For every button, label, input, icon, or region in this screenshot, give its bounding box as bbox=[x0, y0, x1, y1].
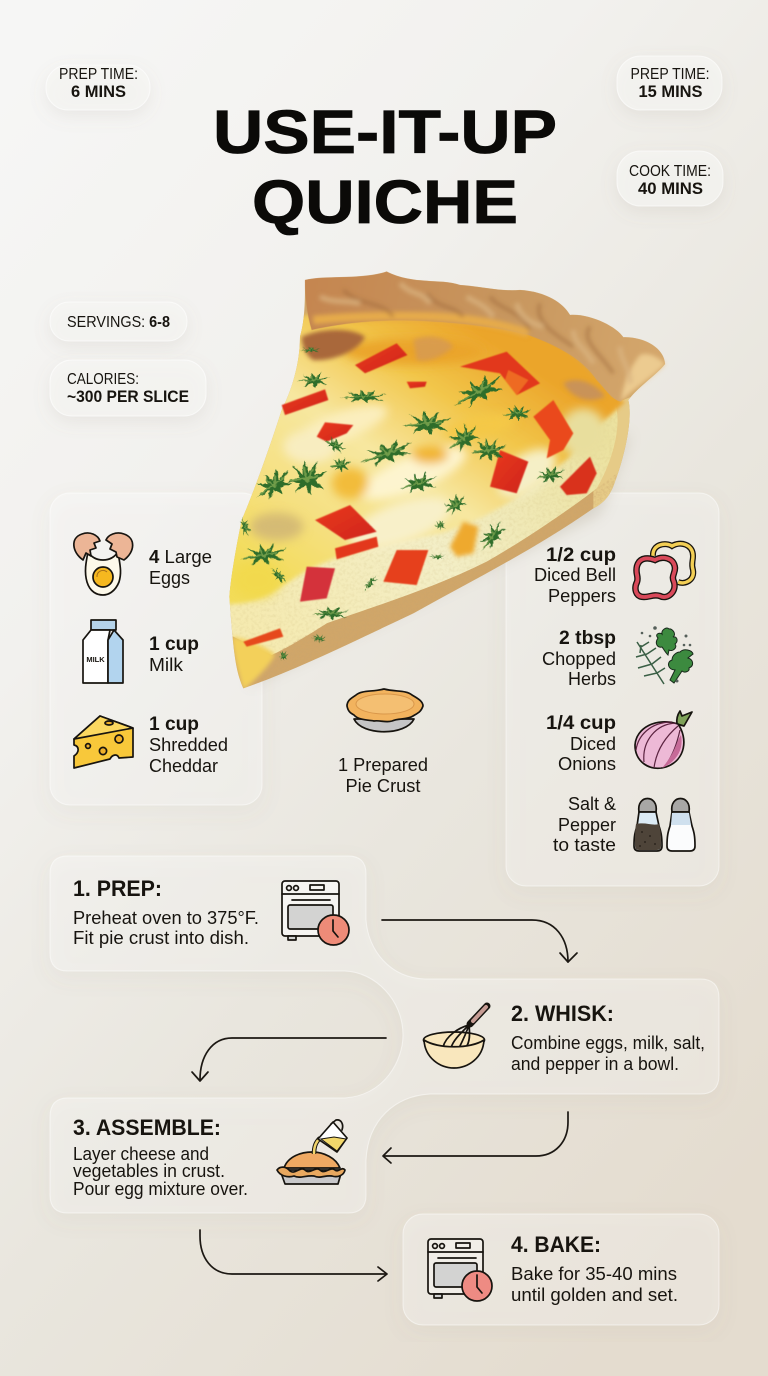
badge: prep time 6 mins: PREP TIME: bbox=[59, 66, 138, 83]
panel: ingredients right bbox=[506, 493, 719, 886]
step 2 text: 2. WHISK: bbox=[511, 1001, 614, 1026]
ingredient text: onions: Onions bbox=[558, 754, 616, 774]
arrow: step 2 to 3 bbox=[192, 1038, 386, 1081]
quiche herbs bbox=[238, 347, 566, 661]
quiche inner layers bbox=[223, 308, 640, 690]
step 3 text: 3. ASSEMBLE: bbox=[73, 1115, 221, 1140]
ingredient text: milk bbox=[149, 634, 199, 675]
step 3 text: vegetables in crust. bbox=[73, 1161, 225, 1181]
badge: prep time 15 mins: 15 MINS bbox=[638, 83, 702, 101]
icon: oven with timer bbox=[282, 881, 349, 945]
step 3 text: Layer cheese and bbox=[73, 1144, 209, 1164]
ingredient text: milk: Milk bbox=[149, 655, 184, 675]
ingredient text: herbs: Herbs bbox=[568, 669, 616, 689]
icon: salt shaker bbox=[667, 798, 695, 851]
ingredient text: peppers bbox=[534, 545, 616, 606]
badge: servings: SERVINGS: 6-8 bbox=[67, 314, 170, 331]
ingredient text: salt and pepper: Salt & bbox=[568, 794, 616, 814]
quiche cream and cheese highlights bbox=[233, 338, 607, 598]
step 3 text bbox=[73, 1115, 248, 1199]
ingredient text: eggs: 4 Large bbox=[149, 547, 212, 567]
quiche orange pepper bbox=[450, 522, 478, 557]
step 4 text bbox=[511, 1232, 678, 1305]
title: USE-IT-UP bbox=[213, 98, 557, 166]
ingredient text: milk: 1 cup bbox=[149, 634, 199, 655]
quiche slice photo illustration bbox=[223, 272, 665, 690]
ingredient text: onions: Diced bbox=[570, 734, 616, 754]
step 1 text bbox=[73, 876, 259, 948]
icon: prepared pie crust bbox=[347, 689, 423, 732]
ingredient text: onions bbox=[546, 713, 616, 774]
icon: milk carton: MILK bbox=[86, 655, 105, 664]
ingredient text: peppers: 1/2 cup bbox=[546, 545, 616, 566]
quiche rim highlight bbox=[621, 354, 665, 402]
icon: pouring into pie bbox=[277, 1120, 347, 1184]
ingredient text: salt and pepper: to taste bbox=[553, 835, 616, 855]
quiche rim shading bbox=[313, 283, 630, 383]
step 4 text: 4. BAKE: bbox=[511, 1232, 601, 1257]
icon: red onion bbox=[635, 711, 692, 768]
quiche crust rim bbox=[305, 272, 665, 402]
badge: cook time 40 mins bbox=[617, 151, 723, 206]
arrow: step 3 back from 2 bbox=[383, 1112, 568, 1163]
ingredient text: herbs: 2 tbsp bbox=[559, 628, 616, 649]
icon: milk carton bbox=[83, 620, 123, 683]
icon: bell pepper rings bbox=[635, 544, 693, 597]
quiche crumb texture bbox=[231, 430, 614, 648]
ingredient text: peppers: Peppers bbox=[548, 586, 616, 606]
text: pie crust label: 1 Prepared bbox=[338, 755, 428, 775]
panel: ingredients left bbox=[50, 493, 262, 805]
badge: prep time 6 mins bbox=[46, 65, 150, 110]
text: pie crust label bbox=[338, 755, 428, 796]
ingredient text: herbs bbox=[542, 628, 616, 689]
ingredient text: cheddar: 1 cup bbox=[149, 714, 199, 735]
icon: oven with timer bbox=[428, 1239, 492, 1301]
arrow: step 1 to 2 bbox=[382, 920, 577, 962]
quiche side wall crust bbox=[593, 397, 631, 508]
step 1 text: 1. PREP: bbox=[73, 876, 162, 901]
title: QUICHE bbox=[252, 168, 518, 236]
badge: calories: ~300 PER SLICE bbox=[67, 388, 189, 406]
step 1 text: Fit pie crust into dish. bbox=[73, 928, 249, 948]
ingredient text: cheddar: Shredded bbox=[149, 735, 228, 755]
ingredient text: cheddar bbox=[149, 714, 228, 776]
icon: whisk and bowl bbox=[424, 1006, 487, 1068]
step 4 text: Bake for 35-40 mins bbox=[511, 1264, 677, 1284]
step 3 text: Pour egg mixture over. bbox=[73, 1179, 248, 1199]
title bbox=[213, 98, 557, 236]
badge: prep time 15 mins bbox=[617, 56, 722, 110]
quiche silhouette and base crust bbox=[229, 272, 665, 688]
step 2 text bbox=[511, 1001, 705, 1074]
step 2 text: and pepper in a bowl. bbox=[511, 1054, 679, 1074]
arrow: step 3 to 4 bbox=[200, 1230, 387, 1281]
step 2 text: Combine eggs, milk, salt, bbox=[511, 1033, 705, 1053]
ingredient text: onions: 1/4 cup bbox=[546, 713, 616, 734]
quiche peppers bbox=[243, 343, 597, 647]
badge: servings bbox=[50, 302, 187, 341]
icon: chopped herbs bbox=[636, 626, 693, 684]
quiche filling side bbox=[227, 403, 618, 655]
text: pie crust label: Pie Crust bbox=[346, 776, 420, 796]
icon: cheese wedge bbox=[74, 716, 133, 768]
ingredient text: peppers: Diced Bell bbox=[534, 565, 616, 585]
quiche browned spots bbox=[302, 330, 365, 360]
step 1 text: Preheat oven to 375°F. bbox=[73, 908, 259, 928]
badge: prep time 15 mins: PREP TIME: bbox=[630, 66, 710, 83]
panel: step 4 bbox=[403, 1214, 719, 1325]
ingredient text: eggs line 2: Eggs bbox=[149, 568, 190, 588]
ingredient text: cheddar: Cheddar bbox=[149, 756, 218, 776]
panel: connected steps 1 to 3 bbox=[50, 856, 719, 1213]
quiche soft shadow bbox=[247, 433, 630, 687]
quiche tip yellow bbox=[232, 637, 275, 690]
ingredient text: herbs: Chopped bbox=[542, 649, 616, 669]
badge: cook time 40 mins: COOK TIME: bbox=[629, 163, 711, 180]
quiche base crust texture bbox=[243, 473, 617, 690]
ingredient text: salt and pepper: Pepper bbox=[558, 815, 616, 835]
icon: cracked egg bbox=[74, 533, 133, 595]
badge: prep time 6 mins: 6 MINS bbox=[71, 83, 126, 101]
badge: calories: CALORIES: bbox=[67, 371, 139, 388]
step 4 text: until golden and set. bbox=[511, 1285, 678, 1305]
ingredient text: salt and pepper bbox=[553, 794, 616, 855]
icon: pepper shaker bbox=[634, 798, 662, 851]
quiche top surface bbox=[223, 308, 625, 604]
badge: cook time 40 mins: 40 MINS bbox=[638, 180, 703, 198]
badge: calories bbox=[50, 360, 206, 416]
